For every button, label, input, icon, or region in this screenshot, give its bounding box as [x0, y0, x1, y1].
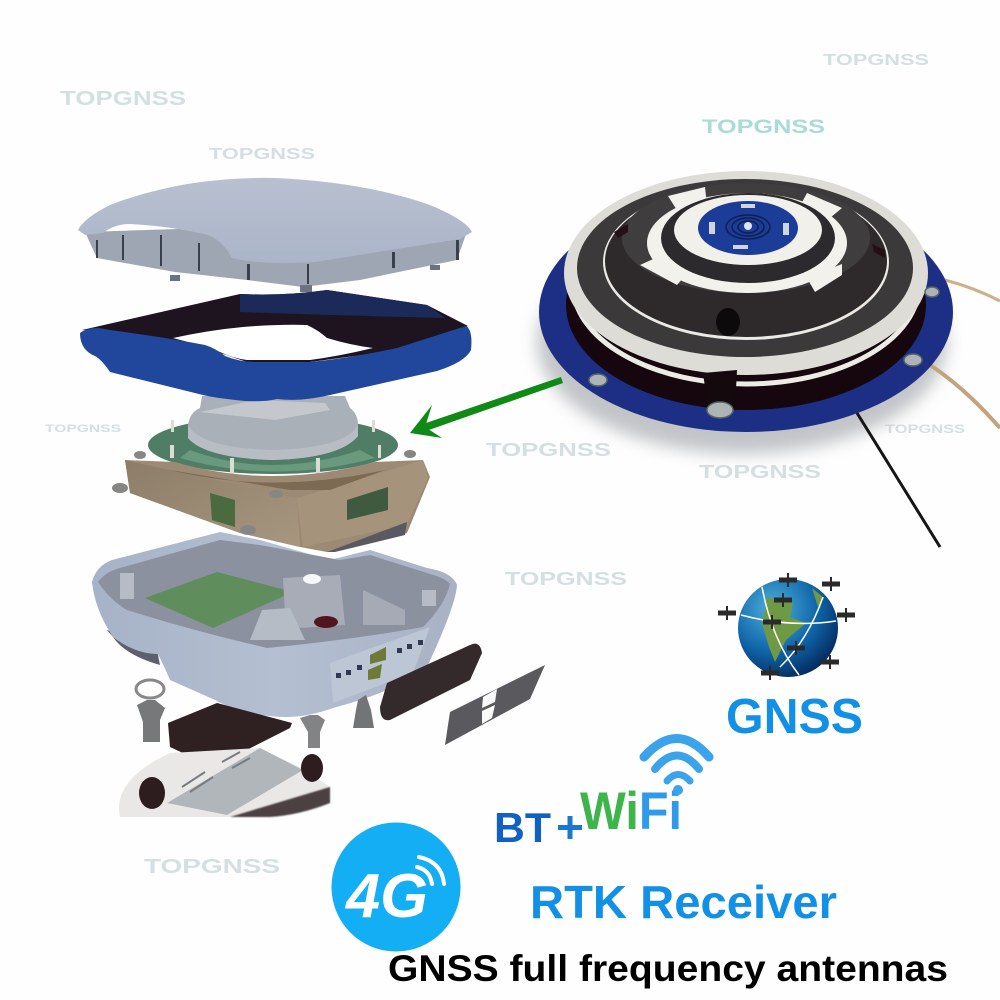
internal right wall — [363, 590, 405, 625]
lower white strip — [573, 186, 919, 384]
blue PCB disc — [539, 192, 953, 432]
watermark: top left: TOPGNSS — [60, 88, 186, 110]
side wall of middle tier — [605, 185, 887, 337]
sticker marks — [482, 689, 497, 724]
orbits — [741, 587, 836, 675]
internal pcb — [145, 572, 293, 628]
connector: right — [353, 695, 374, 728]
4G icon — [332, 822, 460, 952]
bottom caption: GNSS full frequency antennas — [388, 948, 948, 989]
exploded receiver — [78, 178, 545, 817]
watermarks — [45, 52, 965, 878]
internal tower — [283, 575, 345, 628]
connector: centre — [300, 715, 325, 748]
blue gasket frame — [80, 290, 471, 401]
battery — [168, 703, 292, 767]
GNSS globe icon — [718, 573, 855, 680]
chassis left window — [210, 493, 235, 527]
4G text: 4G — [344, 862, 428, 931]
watermark: upper centre: TOPGNSS — [209, 146, 315, 163]
plate knob left — [139, 777, 165, 809]
signal arcs — [417, 857, 444, 884]
antenna photo — [537, 171, 1000, 547]
gasket front — [80, 326, 471, 401]
arrow head — [410, 405, 442, 438]
watermark: right middle: TOPGNSS — [885, 422, 965, 436]
thin white ring — [603, 184, 889, 340]
connectors — [136, 680, 374, 748]
white top — [674, 195, 822, 265]
plate tray — [167, 748, 303, 815]
antenna cables — [857, 280, 1000, 547]
dome lower ring — [188, 425, 358, 460]
watermark: bottom left: TOPGNSS — [144, 856, 280, 878]
centre spiral — [726, 215, 770, 239]
green arrow — [410, 377, 563, 438]
plate knob right — [301, 754, 323, 782]
BT + WiFi logo — [494, 738, 709, 851]
maroon hole — [314, 616, 338, 628]
side screw — [716, 308, 740, 336]
black puck — [661, 193, 835, 283]
watermark: centre: TOPGNSS — [486, 440, 611, 460]
connector: left — [137, 700, 165, 742]
BT text: BT — [494, 804, 551, 851]
lower housing — [92, 532, 457, 717]
bottom plate — [119, 748, 330, 817]
tan cable top — [945, 280, 1000, 301]
antenna dome — [188, 396, 358, 460]
black cable — [857, 413, 940, 547]
tier holes — [614, 224, 885, 258]
satellites — [718, 573, 855, 680]
port windows — [368, 647, 386, 680]
watermark: below antenna: TOPGNSS — [699, 462, 821, 482]
centre pads — [709, 204, 789, 249]
rubber port cover — [380, 644, 482, 720]
chassis screws — [112, 450, 416, 535]
internal standoff — [250, 608, 305, 640]
outer silver ring — [564, 171, 928, 375]
connector ring — [136, 680, 164, 698]
housing underside — [107, 630, 160, 665]
watermark: antenna top: TOPGNSS — [702, 117, 825, 138]
housing shell — [92, 532, 457, 717]
watermark: top right: TOPGNSS — [823, 52, 929, 69]
port slots — [336, 640, 423, 678]
housing interior — [98, 540, 450, 648]
metal chassis — [125, 460, 430, 552]
board lower strip — [180, 450, 375, 472]
chassis right window — [347, 487, 388, 520]
blue centre — [698, 201, 798, 255]
continents — [762, 588, 824, 662]
dark lower body — [566, 200, 926, 410]
mounting screws — [589, 287, 939, 418]
plate disc and shadow — [119, 748, 330, 817]
dome hexagon — [200, 400, 330, 420]
RTK Receiver label: RTK Receiver — [530, 876, 837, 928]
gasket interior — [82, 290, 468, 362]
wifi arcs — [644, 738, 709, 781]
gasket opening — [173, 325, 373, 360]
tan cable lower — [930, 365, 1000, 428]
blue circle — [332, 822, 460, 952]
arrow shaft — [423, 377, 563, 431]
WiFi text: WiFi — [580, 782, 682, 841]
housing corner posts — [120, 573, 436, 606]
dark plate — [577, 179, 913, 357]
wifi dot — [673, 785, 683, 795]
antenna shadow — [537, 230, 947, 454]
centre dot — [744, 222, 752, 230]
white ring with tabs — [640, 187, 847, 293]
battery contacts — [182, 752, 250, 792]
lid skirt — [85, 225, 466, 287]
watermark: left middle: TOPGNSS — [45, 423, 121, 435]
board standoffs — [170, 420, 381, 478]
lid pegs — [170, 265, 440, 292]
chassis dark base — [327, 522, 407, 552]
sticker — [445, 665, 545, 745]
internal antenna module — [112, 396, 430, 552]
lid skirt slots — [96, 235, 459, 284]
watermark: lower centre: TOPGNSS — [505, 569, 627, 589]
tower light — [303, 574, 321, 584]
green board — [148, 416, 398, 474]
lid dome — [78, 178, 472, 263]
middle tier surface — [622, 183, 870, 293]
port panel — [330, 627, 430, 703]
receiver lid — [78, 178, 472, 292]
earth — [738, 579, 838, 677]
plus sign — [558, 816, 582, 839]
GNSS label: GNSS — [726, 690, 863, 744]
lug — [703, 370, 737, 408]
